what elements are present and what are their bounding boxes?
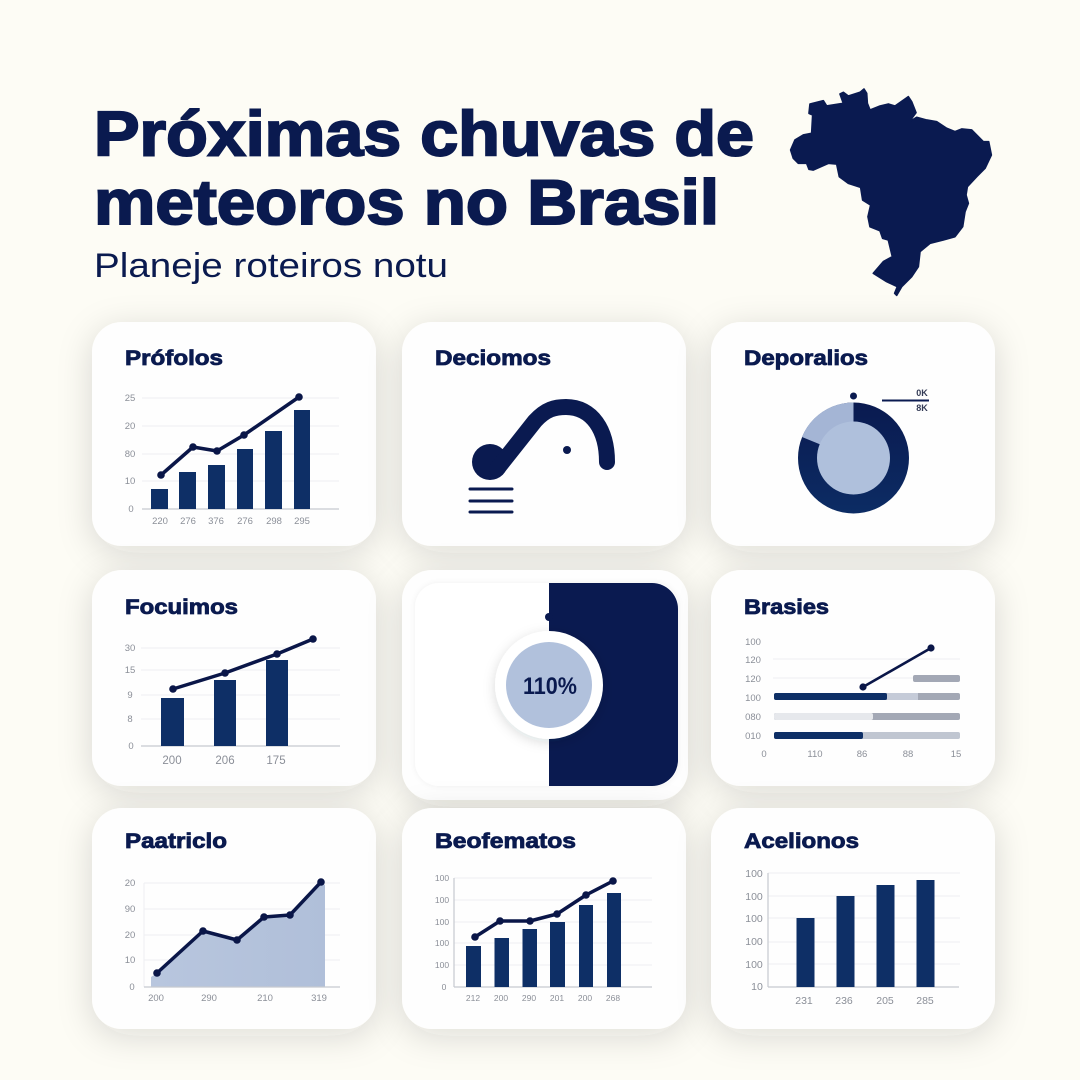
chart: bars and line: 100 <box>435 938 449 948</box>
chart: horizontal bars and line: 88 <box>903 749 913 760</box>
bar chart: 285 <box>916 995 934 1007</box>
heading: Paatriclo: Paatriclo <box>125 830 227 853</box>
gauge: 110%: 110% <box>523 673 577 700</box>
title: Próximas chuvas de <box>94 100 754 170</box>
chart: bars and line: 212 <box>466 993 480 1003</box>
panel: Paatriclo <box>92 808 376 1029</box>
panel: Acelionos <box>711 808 995 1029</box>
panel: Beofematos <box>402 808 686 1029</box>
bar chart: 236 <box>835 995 853 1007</box>
chart: horizontal bars and line: 120 <box>745 655 761 666</box>
donut chart: 0K <box>916 388 928 398</box>
chart: bars and line: 100 <box>435 873 449 883</box>
bar chart: 205 <box>876 995 894 1007</box>
area chart: 0 <box>129 982 135 993</box>
chart: horizontal bars and line: 080 <box>745 712 761 723</box>
chart: bars and line: 20 <box>125 421 135 432</box>
bar chart: 231 <box>795 995 813 1007</box>
chart: bars and line: 0 <box>128 504 134 515</box>
chart: bars and line: 100 <box>435 960 449 970</box>
bar chart: 100 <box>745 913 763 925</box>
area chart: 290 <box>201 993 217 1004</box>
chart: horizontal bars and line: 100 <box>745 693 761 704</box>
chart: bars and line: 206 <box>215 755 235 767</box>
chart: bars and line: 9 <box>127 690 133 701</box>
chart: horizontal bars and line: 15 <box>951 749 961 760</box>
area chart: 20 <box>125 930 135 941</box>
chart: horizontal bars and line: 100 <box>745 637 761 648</box>
area chart: 319 <box>311 993 327 1004</box>
chart: bars and line: 200 <box>494 993 508 1003</box>
area chart: 90 <box>125 904 135 915</box>
chart: bars and line: 290 <box>522 993 536 1003</box>
panel: Deciomos <box>402 322 686 546</box>
chart: bars and line: 175 <box>266 755 286 767</box>
chart: bars and line: 30 <box>125 643 135 654</box>
heading: Prófolos: Prófolos <box>125 347 223 370</box>
icon: map of Brazil <box>791 89 991 295</box>
heading: Deporalios: Deporalios <box>744 347 868 370</box>
area chart: 210 <box>257 993 273 1004</box>
chart: bars and line: 25 <box>125 393 135 404</box>
bar chart: 100 <box>745 868 763 880</box>
chart: bars and line <box>125 393 339 527</box>
chart: bars and line: 100 <box>435 895 449 905</box>
chart: horizontal bars and line: 0 <box>761 749 767 760</box>
area chart: 200 <box>148 993 164 1004</box>
subtitle: Planeje roteiros notu <box>94 247 448 285</box>
title <box>94 100 754 238</box>
panel: Brasies <box>711 570 995 786</box>
chart: bars and line: 8 <box>127 714 133 725</box>
chart: bars and line: 0 <box>442 982 447 992</box>
chart: bars and line: 376 <box>208 516 224 527</box>
heading: Beofematos: Beofematos <box>435 830 576 853</box>
area chart: 10 <box>125 955 135 966</box>
chart: bars and line: 295 <box>294 516 310 527</box>
bar chart: 10 <box>751 981 763 993</box>
icon: curved hook with bulb <box>470 407 607 512</box>
chart: horizontal bars and line: 120 <box>745 674 761 685</box>
area chart <box>125 878 340 1004</box>
heading: Focuimos: Focuimos <box>125 596 238 619</box>
bar chart: 100 <box>745 936 763 948</box>
chart: horizontal bars and line: 110 <box>807 749 823 760</box>
chart: bars and line: 298 <box>266 516 282 527</box>
bar chart <box>745 868 960 1007</box>
chart: bars and line: 268 <box>606 993 620 1003</box>
donut chart <box>798 388 929 514</box>
gauge: 110% <box>495 631 603 739</box>
panel: Focuimos <box>92 570 376 786</box>
chart: bars and line: 0 <box>128 741 134 752</box>
bar chart: 100 <box>745 959 763 971</box>
heading: Brasies: Brasies <box>744 596 829 619</box>
title: meteoros no Brasil <box>94 168 719 238</box>
chart: bars and line: 201 <box>550 993 564 1003</box>
panel: Prófolos <box>92 322 376 546</box>
chart: bars and line: 200 <box>578 993 592 1003</box>
chart: bars and line: 276 <box>237 516 253 527</box>
area chart: 20 <box>125 878 135 889</box>
bar chart: 100 <box>745 891 763 903</box>
donut chart: 8K <box>916 403 928 413</box>
chart: bars and line: 80 <box>125 449 135 460</box>
chart: bars and line: 276 <box>180 516 196 527</box>
chart: bars and line: 220 <box>152 516 168 527</box>
heading: Deciomos: Deciomos <box>435 347 551 370</box>
chart: bars and line <box>125 635 340 767</box>
chart: horizontal bars and line <box>745 637 961 760</box>
chart: horizontal bars and line: 86 <box>857 749 867 760</box>
panel: central percentage card <box>402 570 688 800</box>
heading: Acelionos: Acelionos <box>744 830 859 853</box>
chart: bars and line: 200 <box>162 755 182 767</box>
chart: bars and line: 15 <box>125 665 135 676</box>
panel: Deporalios <box>711 322 995 546</box>
chart: horizontal bars and line: 010 <box>745 731 761 742</box>
chart: bars and line <box>435 873 652 1003</box>
chart: bars and line: 10 <box>125 476 135 487</box>
chart: bars and line: 100 <box>435 917 449 927</box>
